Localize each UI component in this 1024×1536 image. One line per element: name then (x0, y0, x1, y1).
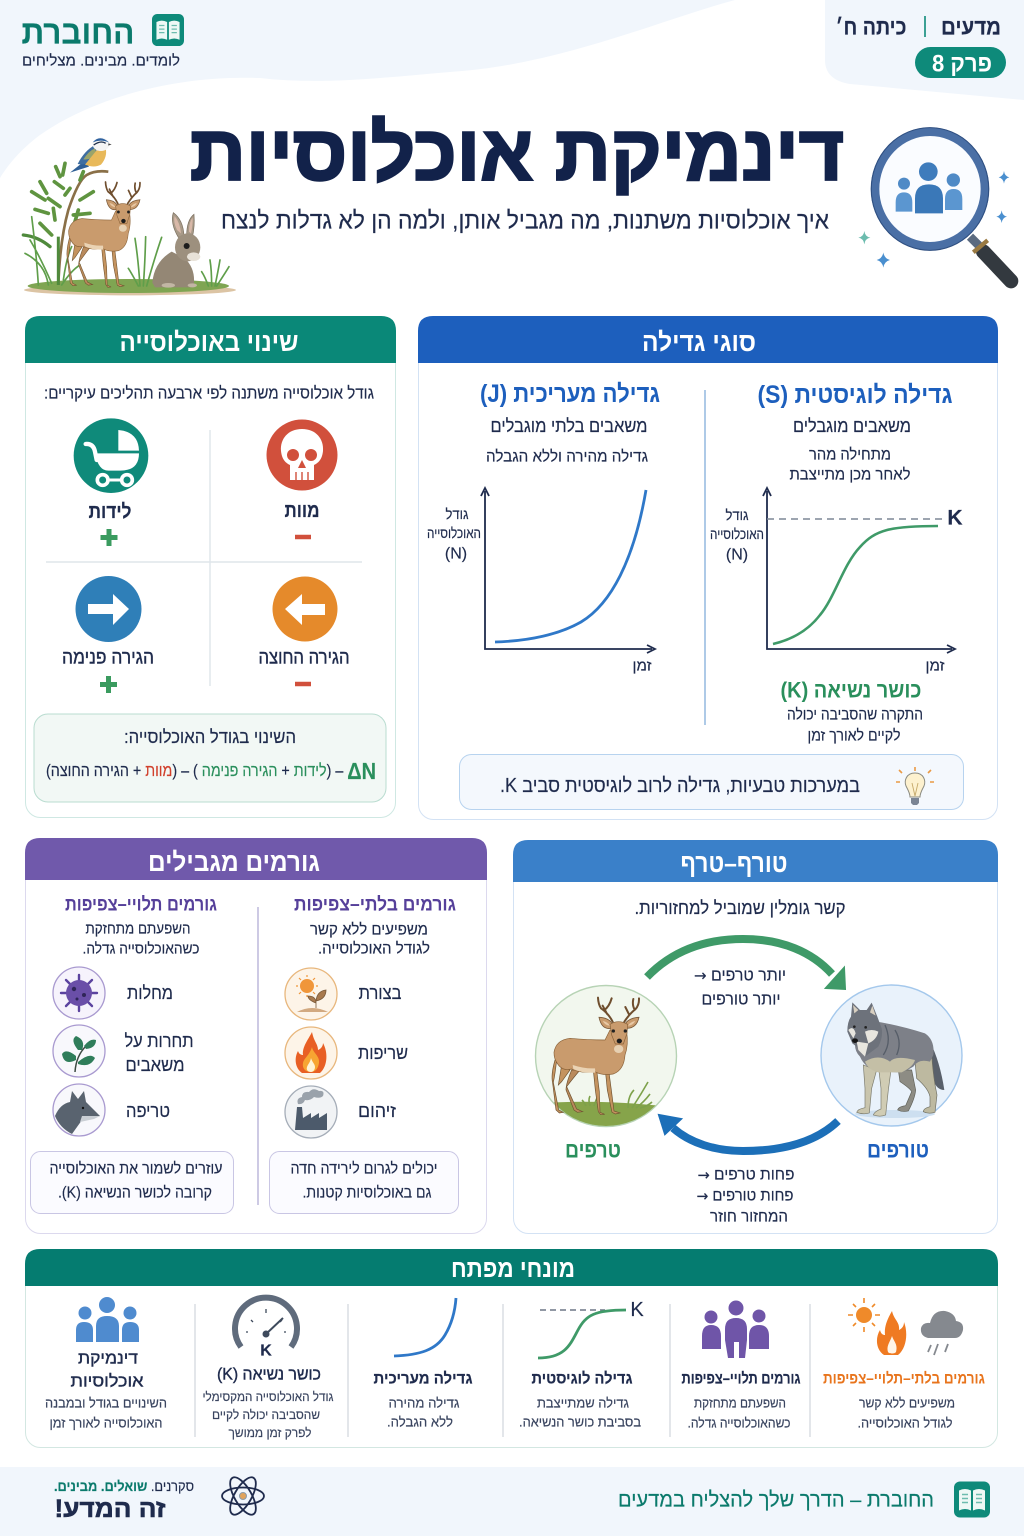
text: carrying capacity description: התקרה שהסביבה יכולה (787, 706, 923, 724)
panel heading: טורף–טרף (680, 848, 788, 878)
grade: כיתה ח׳ (836, 14, 906, 40)
y axis label: (N) (445, 546, 467, 562)
term definition (387, 1396, 460, 1430)
term definition (202, 1390, 334, 1440)
text: exponential description: גדילה מהירה וללא הגבלה (486, 448, 648, 466)
chart: logistic growth (710, 488, 963, 674)
panel heading: גורמים מגבילים (148, 847, 320, 877)
y axis label: גודל (726, 507, 748, 524)
icon: sun (848, 1298, 880, 1332)
term definition: גודל האוכלוסייה המקסימלי (202, 1390, 334, 1404)
text: fewer prey fewer predators (696, 1166, 794, 1226)
icon: arrow out (272, 576, 338, 642)
label: disease: מחלות (127, 983, 173, 1003)
icon: exponential curve (394, 1298, 456, 1356)
minus sign (295, 535, 311, 539)
column: density-independent (270, 894, 458, 1214)
y axis label: (N) (726, 546, 748, 564)
x axis label: זמן (632, 658, 652, 674)
icon: fire (285, 1027, 337, 1079)
text: unlimited resources: משאבים בלתי מוגבלים (490, 416, 648, 436)
term name: גדילה לוגיסטית (532, 1370, 633, 1388)
callout text: במערכות טבעיות, גדילה לרוב לוגיסטית סביב K. (500, 775, 860, 797)
term definition: שהסביבה יכולה לקיים (212, 1408, 320, 1422)
logo name: החוברת (22, 14, 134, 50)
plus sign (100, 676, 117, 693)
term: carrying capacity (202, 1298, 334, 1440)
note box (30, 1152, 234, 1214)
icon: light bulb (896, 767, 934, 805)
icon: fire (877, 1311, 906, 1355)
icon: storm cloud (921, 1311, 963, 1355)
panel: שינוי באוכלוסייה (25, 316, 396, 818)
term: population dynamics (45, 1297, 167, 1430)
label: prey: טרפים (565, 1138, 621, 1162)
text: fewer prey fewer predators: פחות טורפים → (696, 1187, 794, 1205)
logo tagline: לומדים. מבינים. מצליחים (22, 52, 180, 70)
panel header (25, 838, 487, 880)
term definition (688, 1396, 790, 1430)
label: competition for resources: משאבים (126, 1055, 184, 1075)
text: carrying capacity description (787, 706, 923, 744)
label: drought: בצורת (358, 983, 402, 1003)
y axis label (710, 507, 764, 564)
term name: כושר נשיאה (K) (217, 1364, 321, 1384)
column description: כשהאוכלוסייה גדלה. (82, 940, 200, 958)
y axis label: גודל (446, 506, 468, 523)
term definition: לגודל האוכלוסייה. (858, 1416, 952, 1430)
icon: purple people (702, 1300, 769, 1358)
term name: גדילה מעריכית (374, 1370, 473, 1388)
term name: אוכלוסיות (70, 1372, 144, 1390)
icon: book (954, 1482, 990, 1518)
note box (270, 1152, 458, 1214)
minus sign (295, 682, 311, 686)
illustration: magnifying glass with people (858, 128, 1011, 281)
label: predation: טריפה (126, 1101, 170, 1121)
y axis label: האוכלוסייה (710, 526, 764, 543)
chart: exponential growth (427, 488, 655, 674)
label: fires: שריפות (358, 1043, 408, 1063)
term name (70, 1348, 144, 1390)
panel: טורף-טרף (513, 840, 998, 1234)
term name: גורמים תלויי–צפיפות (682, 1370, 801, 1388)
panel: סוגי גדילה (418, 316, 998, 820)
term definition: האוכלוסייה לאורך זמן (50, 1416, 162, 1430)
icon: gauge: K (260, 1342, 272, 1360)
column description: משפיעים ללא קשר (310, 922, 428, 938)
term definition: ללא הגבלה. (387, 1414, 453, 1430)
panel header (25, 1249, 998, 1286)
text: logistic description: לאחר מכן מתייצבת (790, 466, 910, 484)
term: density-independent factors (823, 1298, 985, 1430)
subtitle: איך אוכלוסיות משתנות, מה מגביל אותן, ולמה הן לא גדלות לנצח (221, 208, 829, 234)
subject and chapter badge (836, 14, 1006, 78)
illustration: forest animals (23, 138, 236, 295)
note box: קרובה לכושר הנשיאה (K). (58, 1184, 212, 1202)
icon: blue people (76, 1297, 139, 1342)
column heading: גורמים בלתי–צפיפות (294, 894, 456, 916)
icon: deer (552, 998, 639, 1115)
arrow: predator to prey (659, 1115, 838, 1151)
subject: מדעים (941, 14, 1001, 40)
text: carrying capacity description: לקיים לאורך זמן (808, 728, 900, 744)
icon: gauge (235, 1298, 297, 1360)
circle: prey (534, 984, 678, 1128)
term definition (45, 1396, 167, 1430)
panel heading: שינוי באוכלוסייה (120, 327, 298, 357)
term definition: גדילה מהירה (388, 1396, 460, 1410)
icon: rabbit (152, 213, 200, 288)
circle: predator (821, 985, 962, 1126)
column: density-dependent (30, 894, 234, 1214)
y axis label: האוכלוסייה (427, 525, 481, 542)
text: logistic description (790, 446, 910, 484)
label: immigration: הגירה פנימה (62, 648, 154, 668)
footer slogan: זה המדע! (54, 1495, 166, 1523)
text: fewer prey fewer predators: המחזור חוזר (710, 1208, 788, 1226)
icon: deer (67, 182, 140, 287)
heading: exponential: גדילה מעריכית (J) (480, 380, 660, 408)
heading: carrying capacity: כושר נשיאה (K) (780, 678, 922, 702)
callout (460, 754, 964, 810)
icon: virus (53, 967, 105, 1019)
icon: plant (53, 1025, 105, 1077)
panel header (513, 840, 998, 882)
footer (0, 1467, 1024, 1536)
column description (310, 922, 430, 958)
icon: skull (266, 420, 338, 490)
term name: גורמים בלתי–תלויי–צפיפות (823, 1370, 985, 1388)
y axis label (427, 506, 481, 562)
arrow: prey to predator (647, 939, 845, 989)
footer tagline: סקרנים. שואלים. מבינים. (54, 1478, 194, 1494)
formula title: השינוי בגודל האוכלוסייה: (124, 727, 296, 747)
intro text: קשר גומלין שמוביל למחזוריות. (634, 898, 846, 918)
panel heading: סוגי גדילה (642, 327, 756, 357)
term: exponential growth (374, 1298, 473, 1430)
term name: דינמיקת (78, 1348, 138, 1368)
icon: wolf (847, 1002, 944, 1116)
term definition: בסביבת כושר הנשיאה. (519, 1414, 641, 1430)
label: K: K (947, 506, 963, 530)
term definition: השינויים בגודל ובמבנה (45, 1396, 167, 1410)
term definition: גדילה שמתייצבת (537, 1396, 629, 1410)
icon: arrow in (76, 576, 142, 642)
text: fewer prey fewer predators: פחות טרפים → (698, 1166, 794, 1184)
column description (82, 920, 200, 958)
label: emigration: הגירה החוצה (258, 648, 350, 668)
label: predators: טורפים (867, 1138, 929, 1162)
text: more prey more predators: יותר טרפים → (694, 966, 786, 984)
term definition (519, 1396, 641, 1430)
term definition: כשהאוכלוסייה גדלה. (688, 1416, 790, 1430)
panel heading: מונחי מפתח (451, 1255, 575, 1283)
label: births: לידות (88, 501, 132, 523)
title: דינמיקת אוכלוסיות (190, 109, 844, 197)
note box: גם באוכלוסיות קטנות. (302, 1184, 432, 1202)
label: pollution: זיהום (358, 1101, 396, 1121)
column heading: גורמים תלויי–צפיפות (65, 894, 217, 916)
icon: bird (70, 138, 112, 173)
note box: יכולים לגרום לירידה חדה (290, 1160, 438, 1178)
label: deaths: מוות (284, 500, 320, 522)
label: competition for resources (124, 1031, 194, 1075)
chapter pill (915, 47, 1006, 78)
formula: ΔN – (לידות + הגירה פנימה ) – (מוות + הגירה החוצה) (46, 758, 376, 784)
panel: גורמים מגבילים (25, 838, 487, 1234)
term definition: משפיעים ללא קשר (859, 1396, 955, 1410)
icon: logistic curve: K (630, 1299, 644, 1321)
panel: מונחי מפתח (25, 1249, 998, 1448)
term definition: לפרק זמן ממושך (228, 1426, 312, 1440)
icon: book (152, 14, 184, 46)
note box: עוזרים לשמור את האוכלוסייה (50, 1160, 222, 1178)
formula box (34, 714, 386, 802)
icon: pollution (285, 1086, 337, 1138)
column description: לגודל האוכלוסייה. (318, 940, 430, 958)
column description: השפעתם מתחזקת (86, 920, 190, 938)
logo: החוברת (22, 14, 184, 70)
text: logistic description: מתחילה מהר (809, 446, 891, 464)
text: more prey more predators: יותר טורפים (702, 990, 780, 1008)
panel header (418, 316, 998, 363)
term: logistic growth (519, 1299, 644, 1430)
footer text: החוברת – הדרך שלך להצליח במדעים (618, 1488, 934, 1512)
icon: drought (285, 968, 337, 1020)
panel header (25, 316, 396, 363)
icon: atom (222, 1474, 264, 1518)
x axis label: זמן (926, 658, 945, 674)
term definition (858, 1396, 955, 1430)
term definition: השפעתם מתחזקת (694, 1396, 786, 1410)
text: limited resources: משאבים מוגבלים (793, 416, 911, 436)
icon: wolf head (53, 1084, 105, 1136)
heading: logistic: גדילה לוגיסטית (S) (758, 381, 953, 409)
intro text: גודל אוכלוסייה משתנה לפי ארבעה תהליכים עיקריים: (44, 384, 374, 402)
icon: stroller (74, 418, 148, 493)
label: competition for resources: תחרות על (124, 1031, 194, 1051)
term: density-dependent factors (682, 1300, 801, 1430)
plus sign (100, 529, 118, 546)
text: more prey more predators (694, 966, 786, 1008)
chapter pill: פרק 8 (932, 50, 992, 78)
